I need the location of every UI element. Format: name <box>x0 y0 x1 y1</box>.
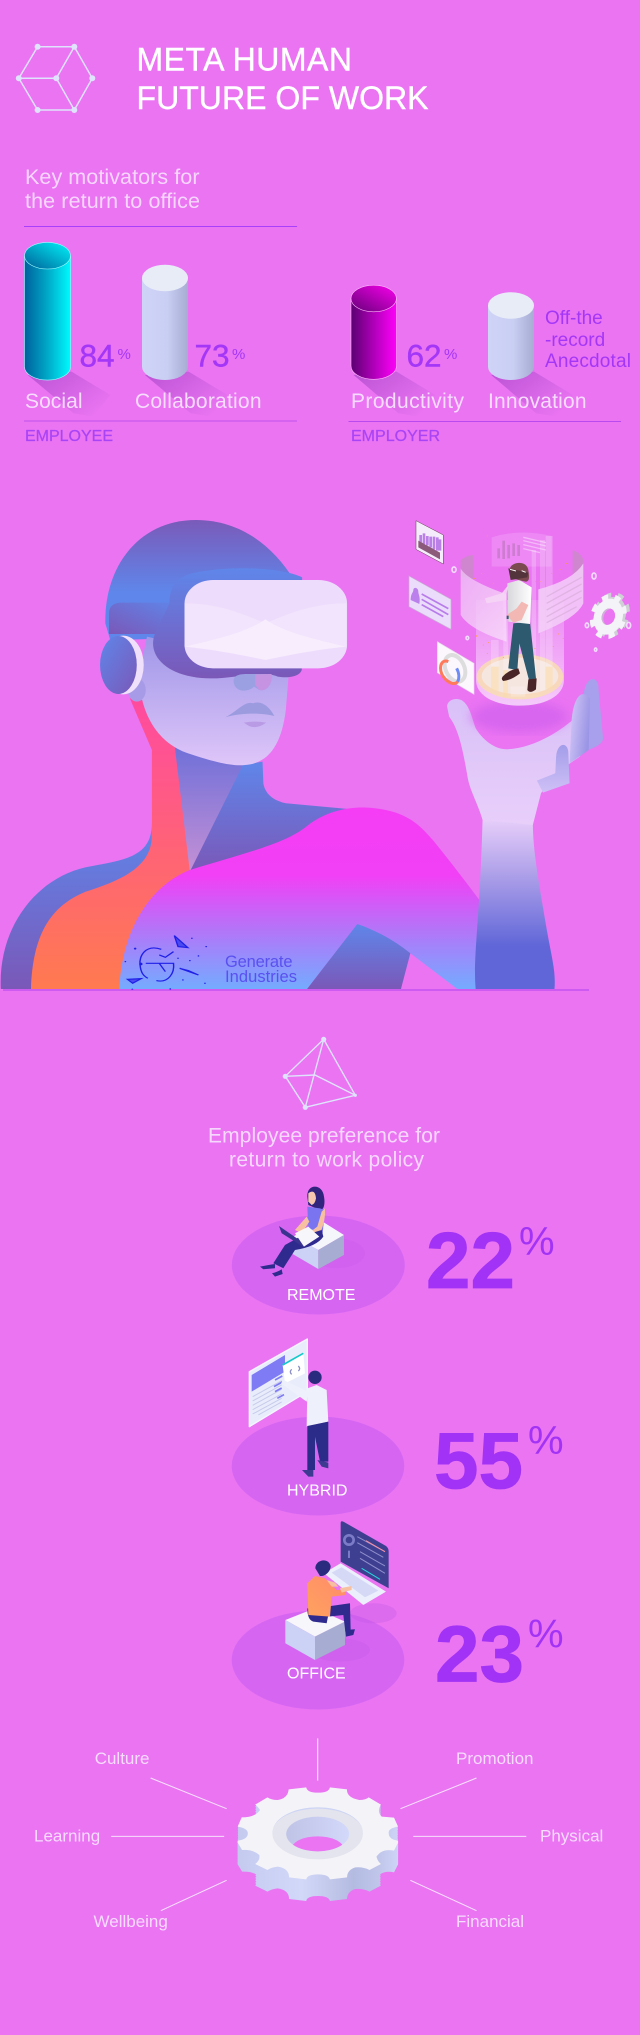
neck light panel <box>175 747 245 872</box>
value: 22 percent: % <box>519 1220 555 1264</box>
label: collaboration: Collaboration <box>135 390 262 413</box>
value: productivity 62 percent: % <box>444 346 457 363</box>
lips <box>225 702 274 727</box>
logo text: Industries <box>225 968 297 986</box>
chart card <box>416 521 443 564</box>
label: employee: EMPLOYEE <box>25 428 113 445</box>
label: promotion: Promotion <box>456 1749 533 1768</box>
value: productivity 62 percent: 62 <box>406 338 442 374</box>
donut card <box>437 642 474 694</box>
value: 23 percent: % <box>528 1613 564 1657</box>
label: innovation: Innovation <box>488 390 586 413</box>
connector lines <box>111 1738 526 1911</box>
headset strap <box>109 603 180 634</box>
value: off-the-record anecdotal: -record <box>545 330 605 351</box>
illustration: man at laptop <box>285 1521 397 1662</box>
illustration: hologram worker <box>409 521 633 706</box>
label: learning: Learning <box>34 1827 100 1846</box>
value: social 84 percent: % <box>118 346 131 363</box>
value: 22 percent: 22 <box>426 1216 515 1305</box>
logo: Generate Industries <box>125 936 297 990</box>
value: collaboration 73 percent: % <box>232 346 245 363</box>
back finger <box>580 679 603 750</box>
illustration: woman with laptop <box>260 1187 365 1277</box>
illustration: man at board <box>249 1339 328 1477</box>
panel: wellbeing gear <box>34 1738 603 1931</box>
particles <box>474 535 567 658</box>
ear cup <box>100 636 144 694</box>
title: META HUMAN <box>136 42 352 78</box>
panel: key motivators <box>24 165 631 445</box>
label: financial: Financial <box>456 1912 524 1931</box>
value: 55 percent: 55 <box>434 1416 523 1505</box>
item: hybrid <box>232 1339 564 1516</box>
palm and thumb <box>447 699 584 825</box>
curved panels <box>461 550 583 642</box>
label: social: Social <box>25 390 82 413</box>
label: remote: REMOTE <box>287 1287 355 1304</box>
cylinder: innovation <box>488 292 534 380</box>
nose <box>234 674 272 691</box>
logo text: Generate <box>225 953 292 971</box>
person with headset <box>485 563 537 692</box>
head <box>105 520 294 640</box>
value: 23 percent: 23 <box>435 1610 524 1699</box>
visor <box>185 580 347 668</box>
near finger <box>537 745 570 793</box>
middle finger <box>570 694 590 763</box>
disc <box>232 1216 405 1314</box>
neck and chest <box>190 762 351 872</box>
illustration: VR figure <box>1 520 633 990</box>
armpit shadow <box>307 924 410 989</box>
label: productivity: Productivity <box>351 390 464 413</box>
forearm <box>475 818 555 989</box>
coral torso strip <box>31 698 192 989</box>
label: office: OFFICE <box>287 1666 346 1683</box>
icon: wireframe pyramid <box>283 1037 357 1110</box>
floating rings <box>452 567 631 651</box>
hologram cylinder <box>476 536 564 706</box>
back shoulder <box>1 823 152 989</box>
label: employer: EMPLOYER <box>351 428 440 445</box>
item: office <box>232 1521 564 1710</box>
cylinder shadows <box>28 372 573 417</box>
heading: key motivators: the return to office <box>25 189 200 213</box>
gear <box>238 1787 398 1901</box>
value: 55 percent: % <box>528 1419 564 1463</box>
value: social 84 percent: 84 <box>80 338 115 374</box>
disc <box>232 1610 404 1710</box>
cylinder: collaboration <box>142 265 188 380</box>
ear <box>128 678 146 702</box>
title: FUTURE OF WORK <box>136 80 428 116</box>
body <box>119 807 482 989</box>
label: hybrid: HYBRID <box>287 1483 347 1500</box>
disc <box>232 1416 404 1516</box>
icon: wireframe cube <box>16 44 95 113</box>
cylinder: social <box>24 242 71 380</box>
palm glow <box>471 701 568 733</box>
item: remote <box>232 1187 555 1314</box>
panel: employee preference <box>208 1037 564 1710</box>
heading: employee preference: Employee preference for <box>208 1125 440 1148</box>
value: collaboration 73 percent: 73 <box>194 338 230 374</box>
value: off-the-record anecdotal: Off-the <box>545 308 603 329</box>
back panel <box>492 532 552 567</box>
label: wellbeing: Wellbeing <box>94 1912 168 1931</box>
profile card <box>409 576 451 629</box>
heading: employee preference: return to work policy <box>229 1149 424 1172</box>
cylinder: productivity <box>351 285 396 379</box>
header <box>16 42 429 116</box>
headset back <box>153 568 302 678</box>
value: off-the-record anecdotal: Anecdotal <box>545 351 631 372</box>
face <box>139 637 289 765</box>
label: physical: Physical <box>540 1827 603 1846</box>
gear icon <box>587 590 633 642</box>
label: culture: Culture <box>95 1749 150 1768</box>
heading: key motivators: Key motivators for <box>25 165 200 189</box>
